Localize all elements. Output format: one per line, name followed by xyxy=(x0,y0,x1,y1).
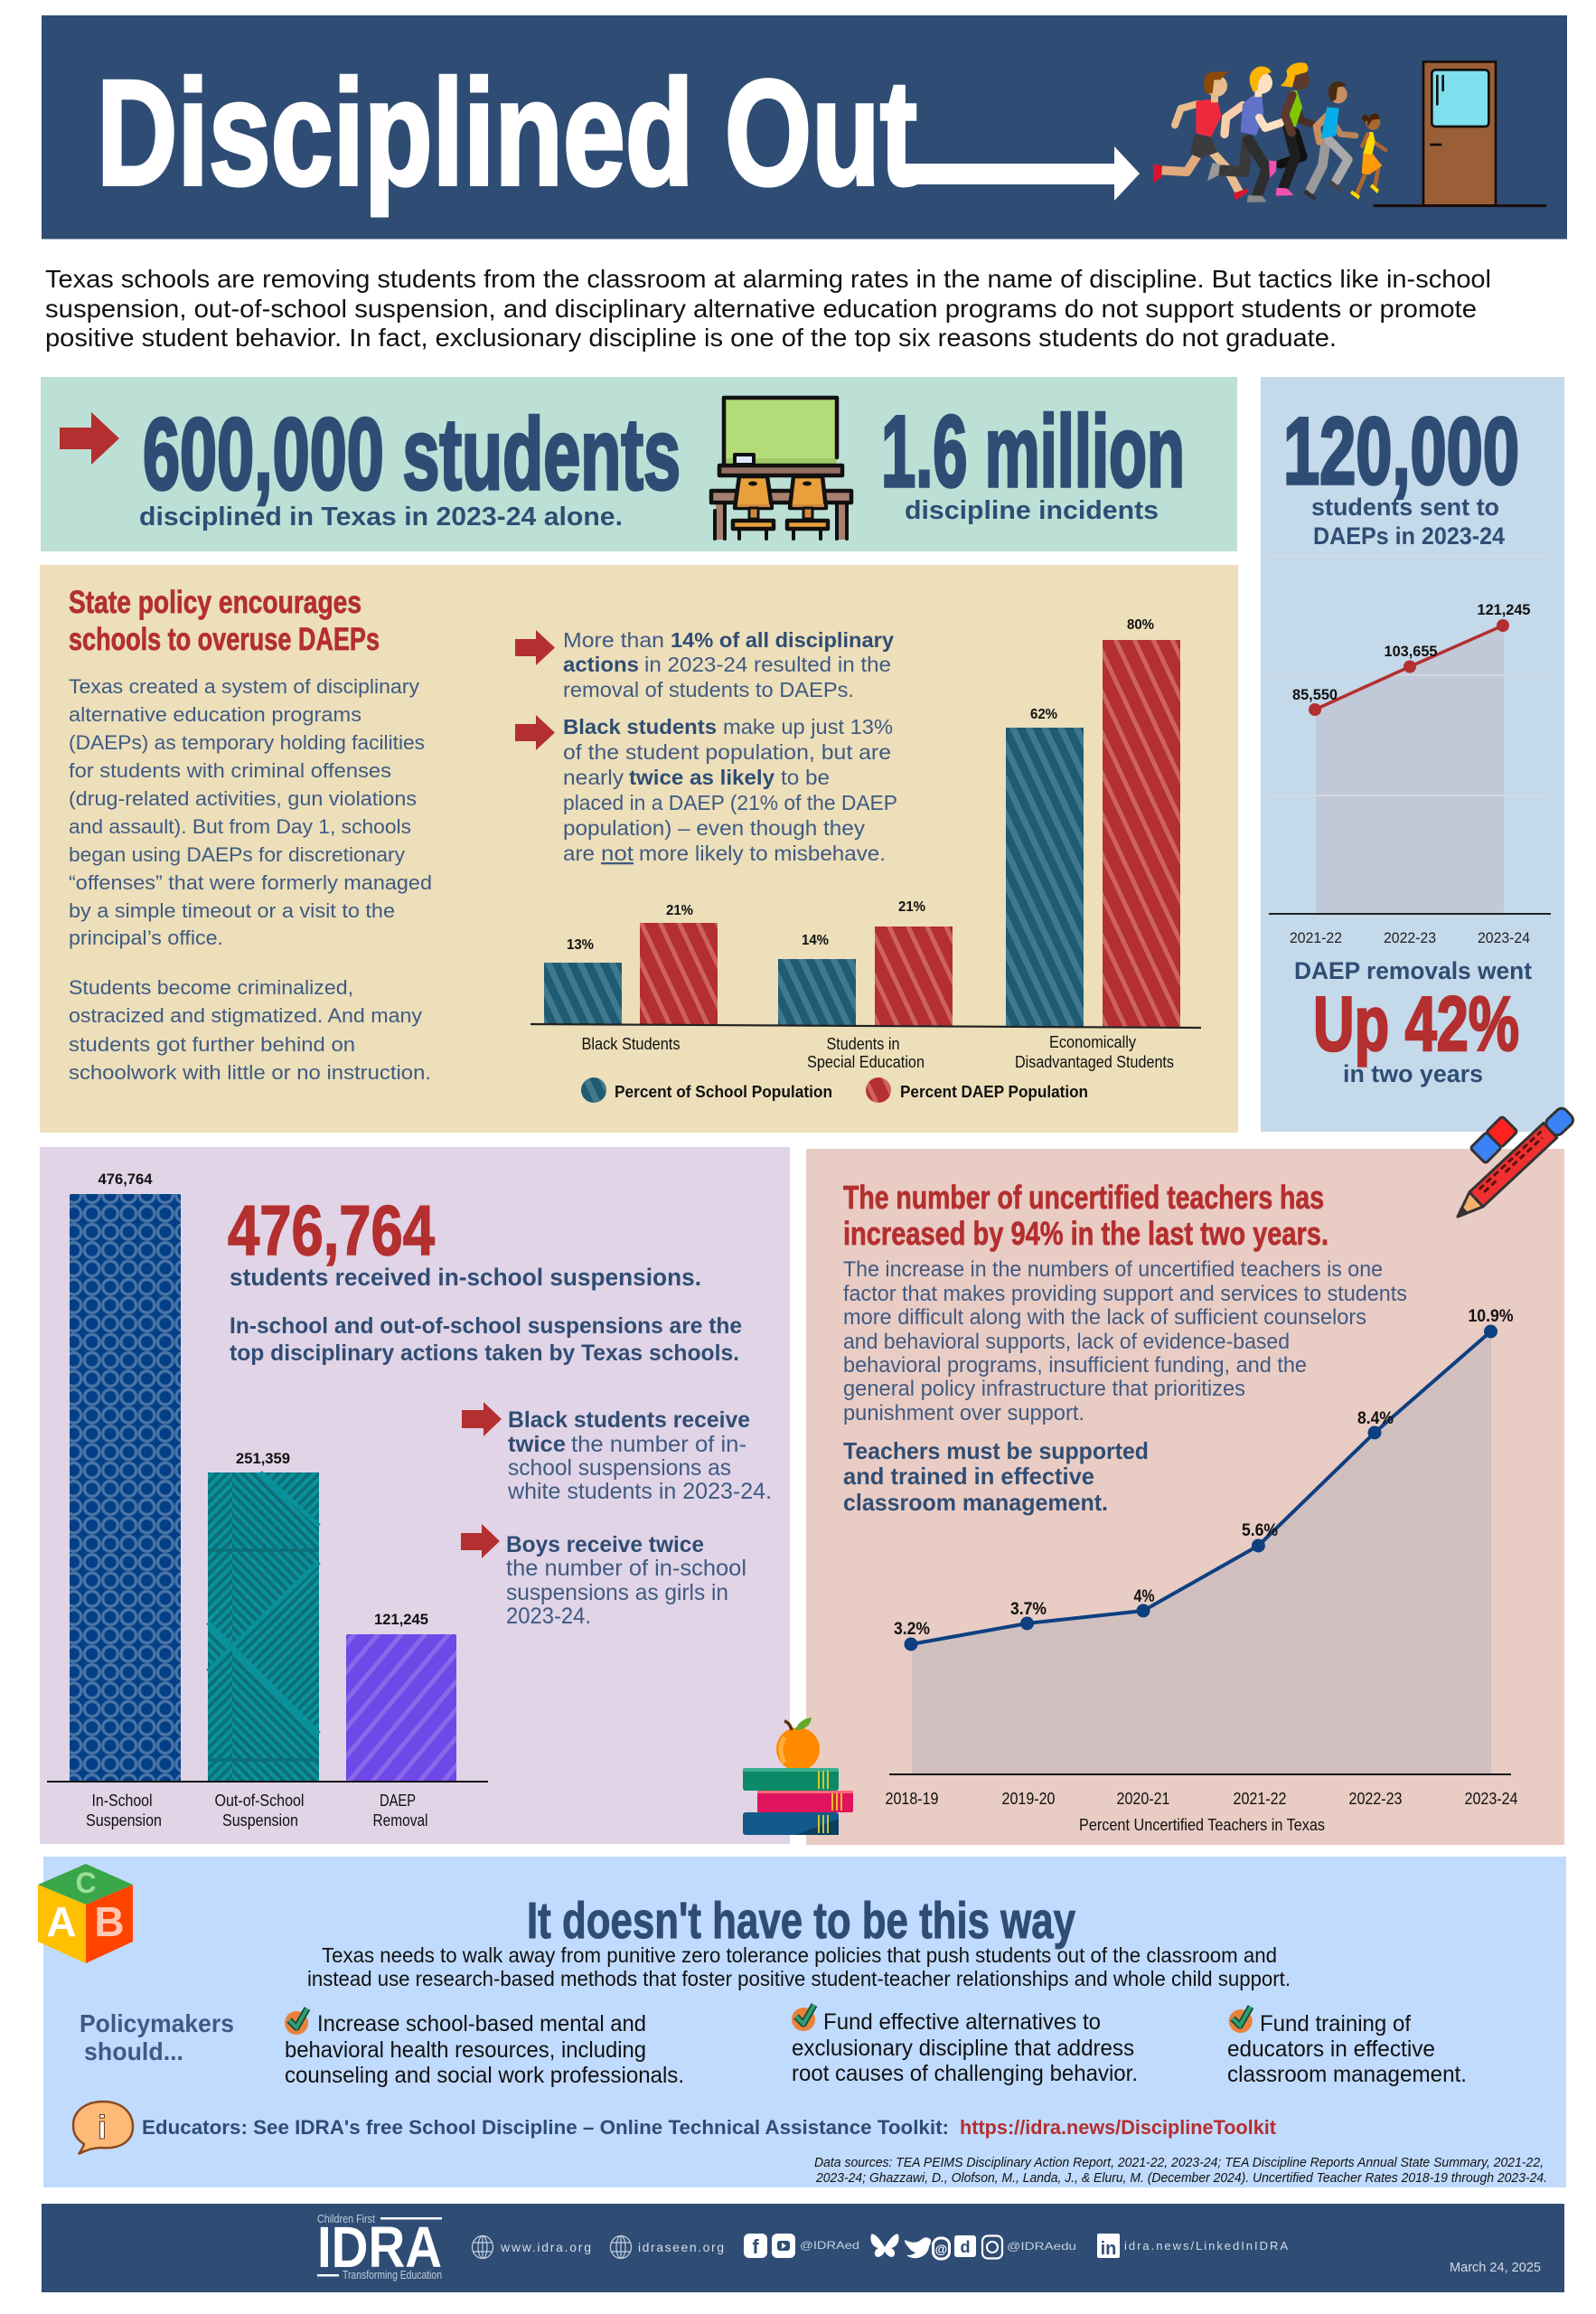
text block: boys twice: the number of in-school xyxy=(506,1556,746,1581)
icon: globe xyxy=(611,2236,631,2258)
text block: top disciplinary actions: In-school and out-of-school suspensions are the xyxy=(230,1313,742,1339)
bar chart: disciplinary actions: Suspension xyxy=(86,1811,162,1830)
heading: uncertified teachers: increased by 94% in the last two years. xyxy=(843,1215,1328,1252)
arrow: red xyxy=(515,715,555,750)
recommendation: effective alternatives: exclusionary discipline that address xyxy=(792,2036,1134,2061)
bar chart: disciplinary actions: Out-of-School xyxy=(215,1792,304,1810)
line chart: percent uncertified teachers: 5.6% xyxy=(1242,1521,1278,1540)
bar chart: disciplinary actions: 476,764 xyxy=(98,1171,153,1188)
bar chart: school vs DAEP population xyxy=(530,617,1201,1071)
icons: bluesky, twitter, threads, tiktok, instagram: @ xyxy=(935,2242,947,2256)
handle: IDRAedu: @IDRAedu xyxy=(1007,2240,1076,2253)
line chart: percent uncertified teachers: 3.2% xyxy=(894,1620,930,1639)
icon: classroom desks and chalkboard xyxy=(711,398,851,540)
intro text block: suspension, out-of-school suspension, and disciplinary alternative education programs do not support students or promote xyxy=(45,295,1477,323)
icons: bluesky, twitter, threads, tiktok, instagram: d xyxy=(960,2238,971,2256)
recommendation: effective alternatives xyxy=(792,2005,1138,2086)
bar chart: school vs DAEP population: Economically xyxy=(1049,1033,1136,1051)
text block: DAEP history: and assault). But from Day 1, schools xyxy=(69,815,411,838)
title: Disciplined Out xyxy=(97,50,917,217)
bar chart: disciplinary actions: DAEP xyxy=(380,1792,416,1810)
bar chart: disciplinary actions: 251,359 xyxy=(236,1450,290,1467)
line chart: percent uncertified teachers: Percent Uncertified Teachers in Texas xyxy=(1079,1816,1325,1834)
caption: students sent to DAEPs: DAEPs in 2023-24 xyxy=(1313,522,1505,550)
line chart: percent uncertified teachers: 3.7% xyxy=(1010,1600,1047,1619)
text block: boys twice: suspensions as girls in xyxy=(506,1580,728,1605)
line chart: percent uncertified teachers: 10.9% xyxy=(1468,1307,1514,1326)
text block: boys twice: 2023-24. xyxy=(506,1604,591,1629)
icon: apple on books xyxy=(743,1717,853,1835)
arrow: red xyxy=(462,1402,502,1436)
text block: Black students xyxy=(563,715,897,865)
text block: support factors: and behavioral supports, lack of evidence-based xyxy=(843,1330,1290,1354)
text block: Black students: Black students xyxy=(563,715,717,738)
text block: Black students: not xyxy=(601,842,634,865)
line chart: percent uncertified teachers: 2022-23 xyxy=(1348,1790,1403,1808)
text block: 14 percent of actions: More than xyxy=(563,628,664,652)
bar chart: school vs DAEP population: 80% xyxy=(1127,617,1154,633)
bar chart: school vs DAEP population: Black Students xyxy=(582,1035,680,1053)
stat: 600,000 students: 600,000 students xyxy=(143,398,681,511)
text block: data sources: Data sources: TEA PEIMS Disciplinary Action Report, 2021-22, 2023-24; TEA Discipline Reports Annual State Summary, 2021-22, xyxy=(814,2156,1544,2170)
text block: Black students: to be xyxy=(781,766,830,789)
caption: in-school suspensions: students received in-school suspensions. xyxy=(230,1264,701,1291)
text block: DAEP history: schoolwork with little or no instruction. xyxy=(69,1061,431,1084)
recommendation: educator training: Fund training of xyxy=(1260,2011,1411,2037)
bar chart: school vs DAEP population: Students in xyxy=(826,1035,900,1053)
panel: suspensions xyxy=(40,1147,790,1844)
stat: 1.6 million: 1.6 million xyxy=(881,395,1185,508)
line chart: percent uncertified teachers xyxy=(886,1307,1518,1834)
icon: linkedin: in xyxy=(1101,2239,1116,2259)
icons: bluesky, twitter, threads, tiktok, instagram xyxy=(870,2234,1002,2259)
link: idra.org: www.idra.org xyxy=(500,2240,591,2254)
text block: support factors: more difficult along with the lack of sufficient counselors xyxy=(843,1305,1366,1330)
text block: 14 percent of actions: in 2023-24 resulted in the xyxy=(644,653,891,676)
text block: boys twice: Boys receive twice xyxy=(506,1532,704,1557)
bar chart: disciplinary actions xyxy=(47,1171,488,1830)
icon: info speech bubble xyxy=(73,2102,133,2154)
text block: support factors: punishment over support. xyxy=(843,1401,1084,1425)
icon: info speech bubble: i xyxy=(98,2109,107,2146)
line chart: DAEP removals: 2021-22 xyxy=(1290,929,1342,946)
recommendation: mental health: behavioral health resources, including xyxy=(285,2037,646,2063)
text block: Black students twice: twice xyxy=(508,1432,566,1457)
intro text block: positive student behavior. In fact, exclusionary discipline is one of the top six reasons students do not graduate. xyxy=(45,324,1337,352)
text block: support factors: general policy infrastructure that prioritizes xyxy=(843,1377,1245,1401)
text block: Black students twice xyxy=(507,1407,772,1504)
text block: DAEP history: (DAEPs) as temporary holding facilities xyxy=(69,731,425,754)
text block: zero tolerance: instead use research-based methods that foster positive student-teacher relationships and whole child support. xyxy=(307,1967,1291,1990)
label: policymakers should: should... xyxy=(84,2037,183,2065)
text block: DAEP history: for students with criminal offenses xyxy=(69,759,391,782)
text block: support factors: behavioral programs, insufficient funding, and the xyxy=(843,1353,1307,1378)
text block: teachers must be supported: Teachers must be supported xyxy=(843,1437,1149,1464)
recommendation: educator training: educators in effective xyxy=(1227,2037,1435,2062)
bar chart: school vs DAEP population: Special Education xyxy=(807,1053,925,1071)
arrow: red xyxy=(461,1524,500,1558)
bar chart: disciplinary actions: Suspension xyxy=(222,1811,298,1830)
text block: top disciplinary actions: top disciplinary actions taken by Texas schools. xyxy=(230,1340,739,1366)
arrow: title to door xyxy=(906,146,1140,201)
footer xyxy=(42,2204,1564,2292)
callout: educators toolkit xyxy=(142,2116,1277,2139)
icon: running students xyxy=(1153,62,1385,202)
heading: state policy: State policy encourages xyxy=(69,585,361,620)
label: policymakers should: Policymakers xyxy=(80,2009,234,2037)
text block: Black students: population) – even though they xyxy=(563,816,866,840)
text block: Black students: of the student population, but are xyxy=(563,740,891,764)
text block: Black students: are xyxy=(563,842,595,865)
stat: Up 42%: Up 42% xyxy=(1313,982,1519,1068)
line chart: percent uncertified teachers: 4% xyxy=(1133,1587,1155,1606)
line chart: DAEP removals xyxy=(1269,556,1551,946)
line chart: DAEP removals: 85,550 xyxy=(1292,686,1338,703)
logo: IDRA: IDRA xyxy=(317,2215,442,2280)
text block: zero tolerance xyxy=(307,1943,1291,1990)
bar chart: school vs DAEP population: Disadvantaged Students xyxy=(1015,1053,1174,1071)
text block: support factors: The increase in the numbers of uncertified teachers is one xyxy=(843,1257,1383,1282)
recommendation: effective alternatives: Fund effective alternatives to xyxy=(823,2009,1101,2035)
text block: DAEP history xyxy=(69,675,432,1084)
text block: 14 percent of actions: actions xyxy=(563,653,639,676)
icon: ABC block xyxy=(38,1864,133,1963)
text block: Black students twice: school suspensions as xyxy=(508,1455,731,1481)
text block: Black students: more likely to misbehave. xyxy=(639,842,886,865)
arrow: red xyxy=(515,630,555,665)
bar chart: school vs DAEP population: 21% xyxy=(898,899,925,915)
icon: door xyxy=(1375,61,1545,206)
text block: boys twice xyxy=(506,1532,746,1629)
bar chart: school vs DAEP population: 13% xyxy=(567,937,594,953)
link: idraseen.org: idraseen.org xyxy=(638,2240,724,2254)
caption: disciplined in Texas: disciplined in Texas in 2023-24 alone. xyxy=(139,503,623,531)
caption: in two years: in two years xyxy=(1343,1060,1483,1087)
heading: state policy: schools to overuse DAEPs xyxy=(69,622,380,657)
recommendation: mental health: counseling and social work professionals. xyxy=(285,2063,684,2088)
icon: ABC block: C xyxy=(75,1867,97,1899)
text block: zero tolerance: Texas needs to walk away from punitive zero tolerance policies that push students out of the classroom and xyxy=(322,1943,1277,1967)
panel: DAEP removals xyxy=(1261,377,1564,1132)
line chart: percent uncertified teachers: 8.4% xyxy=(1357,1409,1394,1428)
text block: Black students: make up just 13% xyxy=(723,715,893,738)
caption: students sent to DAEPs: students sent to xyxy=(1311,494,1499,521)
text block: Black students: nearly xyxy=(563,766,624,789)
line chart: percent uncertified teachers: 2023-24 xyxy=(1464,1790,1518,1808)
text block: DAEP history: students got further behind on xyxy=(69,1033,355,1056)
logo: IDRA: Children First xyxy=(317,2212,375,2225)
handle: IDRAed: @IDRAed xyxy=(800,2239,859,2252)
recommendation: educator training: classroom management. xyxy=(1227,2062,1467,2087)
icon: ABC block: B xyxy=(94,1898,125,1945)
line chart: percent uncertified teachers: 2018-19 xyxy=(886,1790,938,1808)
intro text block xyxy=(45,265,1491,352)
bar chart: disciplinary actions: 121,245 xyxy=(374,1611,428,1628)
text block: data sources xyxy=(814,2156,1547,2186)
text block: DAEP history: principal’s office. xyxy=(69,927,223,949)
text block: 14 percent of actions: removal of students to DAEPs. xyxy=(563,678,854,701)
icons: facebook and youtube xyxy=(744,2234,795,2258)
recommendation: mental health xyxy=(285,2008,684,2088)
text block: support factors xyxy=(843,1257,1407,1425)
text block: DAEP history: by a simple timeout or a visit to the xyxy=(69,899,395,922)
arrow: red xyxy=(60,412,119,465)
text block: teachers must be supported: and trained in effective xyxy=(843,1463,1094,1490)
panel: state policy and DAEPs xyxy=(40,565,1238,1133)
callout: educators toolkit: https://idra.news/DisciplineToolkit xyxy=(960,2116,1277,2139)
date: March 24, 2025 xyxy=(1450,2260,1541,2275)
text block: 14 percent of actions xyxy=(563,628,894,701)
chart legend: Percent DAEP Population xyxy=(900,1083,1088,1101)
text block: teachers must be supported: classroom management. xyxy=(843,1489,1108,1516)
bar chart: school vs DAEP population: 21% xyxy=(666,903,693,918)
stat: 476,764: 476,764 xyxy=(228,1190,435,1270)
callout: educators toolkit: Educators: See IDRA's free School Discipline – Online Technical Assistance Toolkit: xyxy=(142,2116,949,2139)
text block: DAEP history: Texas created a system of disciplinary xyxy=(69,675,419,698)
bar chart: disciplinary actions: Removal xyxy=(372,1811,428,1830)
text block: DAEP history: “offenses” that were formerly managed xyxy=(69,871,432,894)
icon: globe xyxy=(472,2236,493,2258)
chart legend xyxy=(581,1077,1088,1103)
text block: DAEP history: began using DAEPs for discretionary xyxy=(69,843,405,866)
caption: discipline incidents: discipline incidents xyxy=(905,496,1159,525)
panel: uncertified teachers xyxy=(806,1149,1564,1845)
text block: Black students twice: white students in 2023-24. xyxy=(507,1479,772,1504)
text block: DAEP history: ostracized and stigmatized. And many xyxy=(69,1004,422,1027)
icon: linkedin xyxy=(1097,2234,1120,2259)
heading: uncertified teachers xyxy=(843,1179,1328,1252)
caption: DAEP removals went: DAEP removals went xyxy=(1294,957,1532,984)
panel: statewide totals xyxy=(41,377,1237,551)
line chart: percent uncertified teachers: 2019-20 xyxy=(1001,1790,1056,1808)
text block: DAEP history: (drug-related activities, gun violations xyxy=(69,787,417,810)
chart legend: Percent of School Population xyxy=(615,1083,832,1101)
text block: teachers must be supported xyxy=(843,1437,1149,1516)
heading: state policy xyxy=(69,585,380,657)
link: linkedin: idra.news/LinkedInIDRA xyxy=(1124,2239,1288,2253)
line chart: DAEP removals: 2023-24 xyxy=(1478,929,1530,946)
line chart: percent uncertified teachers: 2020-21 xyxy=(1117,1790,1169,1808)
text block: Black students twice: the number of in- xyxy=(571,1432,746,1457)
text block: top disciplinary actions xyxy=(230,1313,742,1366)
caption: students sent to DAEPs xyxy=(1311,494,1505,550)
line chart: DAEP removals: 121,245 xyxy=(1477,601,1531,618)
bar chart: school vs DAEP population: 62% xyxy=(1030,707,1057,722)
line chart: DAEP removals: 2022-23 xyxy=(1384,929,1436,946)
heading: uncertified teachers: The number of uncertified teachers has xyxy=(843,1179,1324,1216)
icons: facebook and youtube: f xyxy=(752,2235,759,2258)
text block: DAEP history: Students become criminalized, xyxy=(69,976,353,999)
text block: Black students: placed in a DAEP (21% of the DAEP xyxy=(563,791,897,814)
intro text block: Texas schools are removing students from the classroom at alarming rates in the name of discipline. But tactics like in-school xyxy=(45,265,1491,293)
text block: DAEP history: alternative education programs xyxy=(69,703,361,726)
recommendation: mental health: Increase school-based mental and xyxy=(317,2011,646,2037)
logo: IDRA: Transforming Education xyxy=(343,2268,442,2281)
icon: pencil xyxy=(1450,1105,1575,1224)
icon: eraser xyxy=(1470,1116,1517,1163)
heading: it doesn't have to be this way: It doesn't have to be this way xyxy=(527,1892,1075,1950)
recommendation: educator training xyxy=(1227,2007,1467,2087)
line chart: DAEP removals: 103,655 xyxy=(1385,643,1437,660)
text block: Black students: twice as likely xyxy=(629,766,775,789)
text block: support factors: factor that makes providing support and services to students xyxy=(843,1282,1407,1306)
bar chart: disciplinary actions: In-School xyxy=(92,1792,152,1810)
text block: data sources: 2023-24; Ghazzawi, D., Olofson, M., Landa, J., & Eluru, M. (December 2024). Uncertified Teacher Rates 2018-19 through 2023-24. xyxy=(815,2171,1547,2186)
icon: ABC block: A xyxy=(46,1898,77,1945)
text block: Black students twice: Black students receive xyxy=(508,1407,750,1433)
panel: recommendations xyxy=(38,1857,1566,2187)
text block: 14 percent of actions: 14% of all disciplinary xyxy=(671,628,894,652)
label: policymakers should xyxy=(80,2009,234,2065)
bar chart: school vs DAEP population: 14% xyxy=(802,933,829,948)
recommendation: effective alternatives: root causes of challenging behavior. xyxy=(792,2061,1138,2086)
header banner xyxy=(42,15,1567,239)
line chart: percent uncertified teachers: 2021-22 xyxy=(1233,1790,1287,1808)
